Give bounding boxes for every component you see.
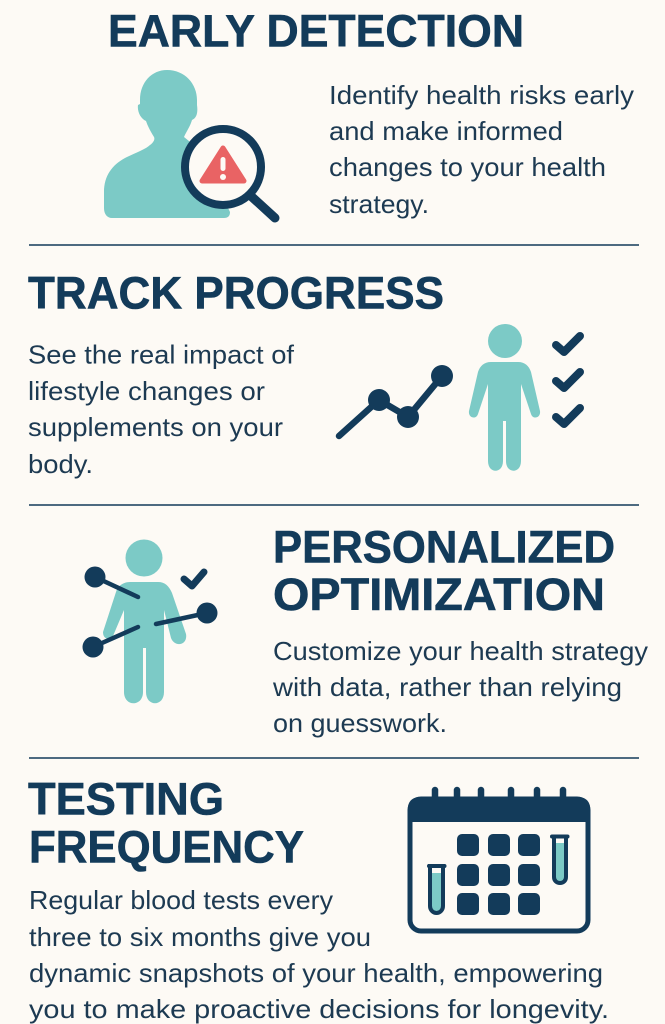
text: early detection description: changes to your health	[329, 152, 606, 182]
text: early detection description: Identify health risks early	[329, 80, 634, 110]
icon: person standing	[469, 324, 540, 471]
heading: testing frequency: FREQUENCY	[29, 822, 304, 872]
heading: testing frequency	[28, 774, 304, 872]
text: track progress description: See the real impact of	[28, 340, 295, 370]
text: track progress description: body.	[28, 449, 93, 479]
section: personalized optimization	[82, 522, 648, 738]
text: early detection description: strategy.	[329, 189, 429, 219]
icon: right test tube	[552, 836, 568, 883]
icon: rising line chart	[339, 365, 453, 436]
section: testing frequency	[28, 774, 609, 1024]
icon: person with magnifying glass and warning	[104, 70, 275, 218]
text: track progress description	[28, 340, 295, 479]
section: track progress	[28, 268, 580, 479]
section: early detection	[104, 6, 634, 219]
text: personalized optimization description: with data, rather than relying	[272, 672, 622, 702]
text: testing frequency description: Regular blood tests every	[29, 885, 333, 915]
text: track progress description: lifestyle changes or	[28, 376, 265, 406]
heading: track progress: TRACK PROGRESS	[28, 268, 444, 318]
heading: personalized optimization	[273, 522, 615, 620]
text: testing frequency description: you to make proactive decisions for longevity.	[29, 994, 609, 1024]
text: personalized optimization description: Customize your health strategy	[273, 636, 648, 666]
heading: early detection: EARLY DETECTION	[108, 6, 524, 56]
text: early detection description	[329, 80, 634, 219]
icon: calendar with test tubes	[408, 790, 590, 931]
text: track progress description: supplements on your	[28, 412, 283, 442]
heading: testing frequency: TESTING	[28, 774, 224, 824]
icon: left test tube	[429, 866, 444, 913]
text: testing frequency description	[29, 885, 609, 1024]
text: early detection description: and make informed	[329, 116, 563, 146]
text: personalized optimization description: on guesswork.	[273, 708, 447, 738]
text: personalized optimization description	[272, 636, 648, 738]
text: testing frequency description: dynamic snapshots of your health, empowering	[29, 958, 603, 988]
heading: personalized optimization: PERSONALIZED	[273, 522, 615, 572]
icon: person with connected nodes	[82, 540, 218, 703]
heading: personalized optimization: OPTIMIZATION	[273, 569, 605, 620]
icon: three check marks	[556, 336, 580, 424]
text: testing frequency description: three to six months give you	[29, 922, 371, 952]
